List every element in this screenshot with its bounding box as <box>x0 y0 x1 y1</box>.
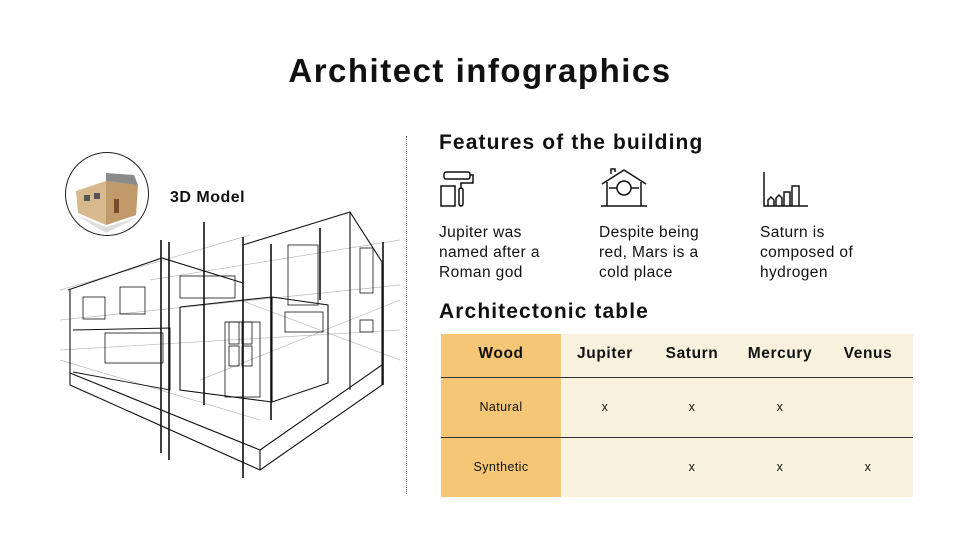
table: x <box>689 460 695 474</box>
table: x <box>777 460 783 474</box>
table: Venus <box>844 345 892 362</box>
table: Wood <box>478 345 524 362</box>
table: x <box>602 400 608 414</box>
feature 1 <box>439 171 540 281</box>
table: x <box>777 400 783 414</box>
table: Saturn <box>666 345 718 362</box>
icon: 3D model photo <box>65 152 149 236</box>
heading: features: Features of the building <box>439 131 703 154</box>
table: Synthetic <box>473 460 529 474</box>
feature 3: Saturn is composed of hydrogen <box>760 224 853 281</box>
divider <box>406 136 407 494</box>
title: Architect infographics <box>288 52 672 89</box>
icon: house <box>601 168 647 207</box>
table: x <box>865 460 871 474</box>
feature 1: Jupiter was named after a Roman god <box>439 224 540 281</box>
heading: table: Architectonic table <box>439 300 649 323</box>
table <box>441 334 913 497</box>
icon: paint roller <box>440 171 474 207</box>
feature 2 <box>599 168 699 281</box>
table: Mercury <box>748 345 812 362</box>
illustration: building sketch <box>60 211 400 478</box>
feature 3 <box>760 172 853 281</box>
feature 2: Despite being red, Mars is a cold place <box>599 224 699 281</box>
table: Natural <box>479 400 523 414</box>
table: Jupiter <box>577 345 633 362</box>
table: x <box>689 400 695 414</box>
icon: chart buildings <box>763 172 808 207</box>
label: 3D Model: 3D Model <box>170 189 245 206</box>
